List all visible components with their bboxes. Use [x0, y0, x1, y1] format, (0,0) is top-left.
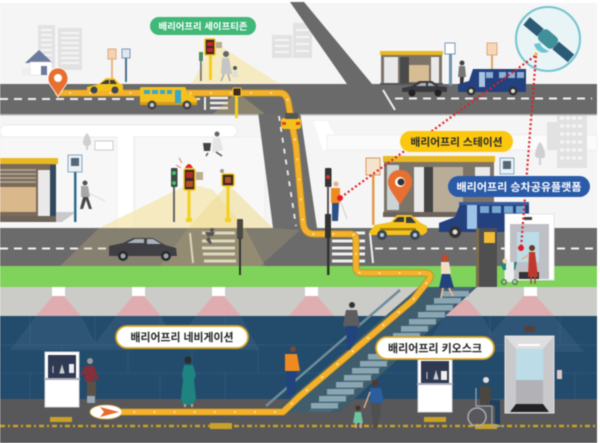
person: stroller walker top — [203, 132, 223, 156]
person: crossing pedestrian shadow — [205, 228, 215, 244]
satellite circle — [516, 7, 580, 71]
bus shelter top right — [380, 51, 443, 85]
label: barrier free navigation — [116, 326, 248, 348]
city background — [0, 3, 597, 228]
barrier free station shelter — [383, 156, 495, 217]
red dotted signal lines — [340, 56, 536, 248]
background buildings — [38, 23, 587, 168]
person: man in orange on escalator — [285, 346, 300, 396]
green strip — [0, 266, 597, 287]
dark bollards and signal poles — [237, 168, 332, 275]
person: elderly at kiosk — [80, 358, 99, 403]
subway floor — [0, 399, 597, 443]
location pin: station — [388, 170, 412, 205]
vehicle: school bus — [140, 87, 197, 110]
ceiling lights — [10, 287, 584, 352]
route path — [58, 93, 430, 412]
label: barrier free ride sharing platform — [448, 176, 590, 197]
traffic signals: safety zone — [199, 39, 241, 118]
icon: trees — [83, 133, 545, 165]
vehicle: lower black car — [109, 238, 177, 261]
label: barrier free kiosk: 배리어프리 키오스크 — [388, 341, 482, 355]
vehicle: top black car — [402, 81, 447, 96]
navigation start marker — [90, 405, 122, 419]
bus stop sign: middle left — [366, 158, 380, 225]
person: safety zone pedestrian with child — [221, 51, 238, 81]
vehicle: top blue bus — [458, 69, 526, 96]
icon: house — [22, 50, 53, 75]
traffic signals: crossing — [171, 158, 234, 222]
street elevator — [505, 214, 554, 280]
escalator — [266, 287, 477, 413]
road markings — [0, 90, 597, 263]
subway elevator — [505, 326, 562, 413]
person: blind pedestrian with cane — [80, 180, 105, 209]
bus stop sign: station — [500, 158, 514, 174]
person: man in grey on escalator — [343, 302, 360, 350]
roads — [0, 2, 597, 266]
persons: mother with child — [353, 380, 384, 429]
person: woman on stairs — [439, 254, 454, 298]
subway wall — [0, 316, 597, 400]
left bus shelter — [0, 158, 76, 222]
vehicle: platform blue bus — [439, 202, 529, 238]
label: barrier free safety zone: 배리어프리 세이프티존 — [158, 20, 248, 32]
label: barrier free station — [400, 131, 513, 152]
person: waiting pedestrian — [458, 60, 466, 86]
vehicle: route taxi on side road — [281, 113, 301, 129]
station platform — [0, 287, 597, 316]
left bus stop sign — [68, 155, 82, 222]
label: barrier free ride sharing platform: 배리어프리 승차공유플랫폼 — [456, 180, 582, 194]
location pin: start — [48, 68, 68, 97]
person: wheelchair user — [468, 377, 502, 426]
bus stop signs — [108, 43, 497, 86]
red signal points — [337, 195, 524, 251]
escalator entrance pillar — [476, 228, 497, 287]
vehicle: top taxi — [87, 78, 123, 94]
person: blind man at signal — [331, 182, 347, 221]
label: barrier free station: 배리어프리 스테이션 — [410, 136, 502, 148]
person: stroller parent — [500, 245, 538, 284]
subway kiosk right — [417, 358, 453, 412]
label: barrier free navigation: 배리어프리 네비게이션 — [130, 330, 234, 344]
person: woman in green dress — [181, 356, 196, 407]
label: barrier free kiosk — [376, 337, 494, 359]
label: barrier free safety zone — [150, 17, 256, 35]
safety zone light cones — [60, 42, 300, 266]
subway kiosk left — [44, 352, 80, 407]
vehicle: station taxi — [369, 215, 427, 240]
